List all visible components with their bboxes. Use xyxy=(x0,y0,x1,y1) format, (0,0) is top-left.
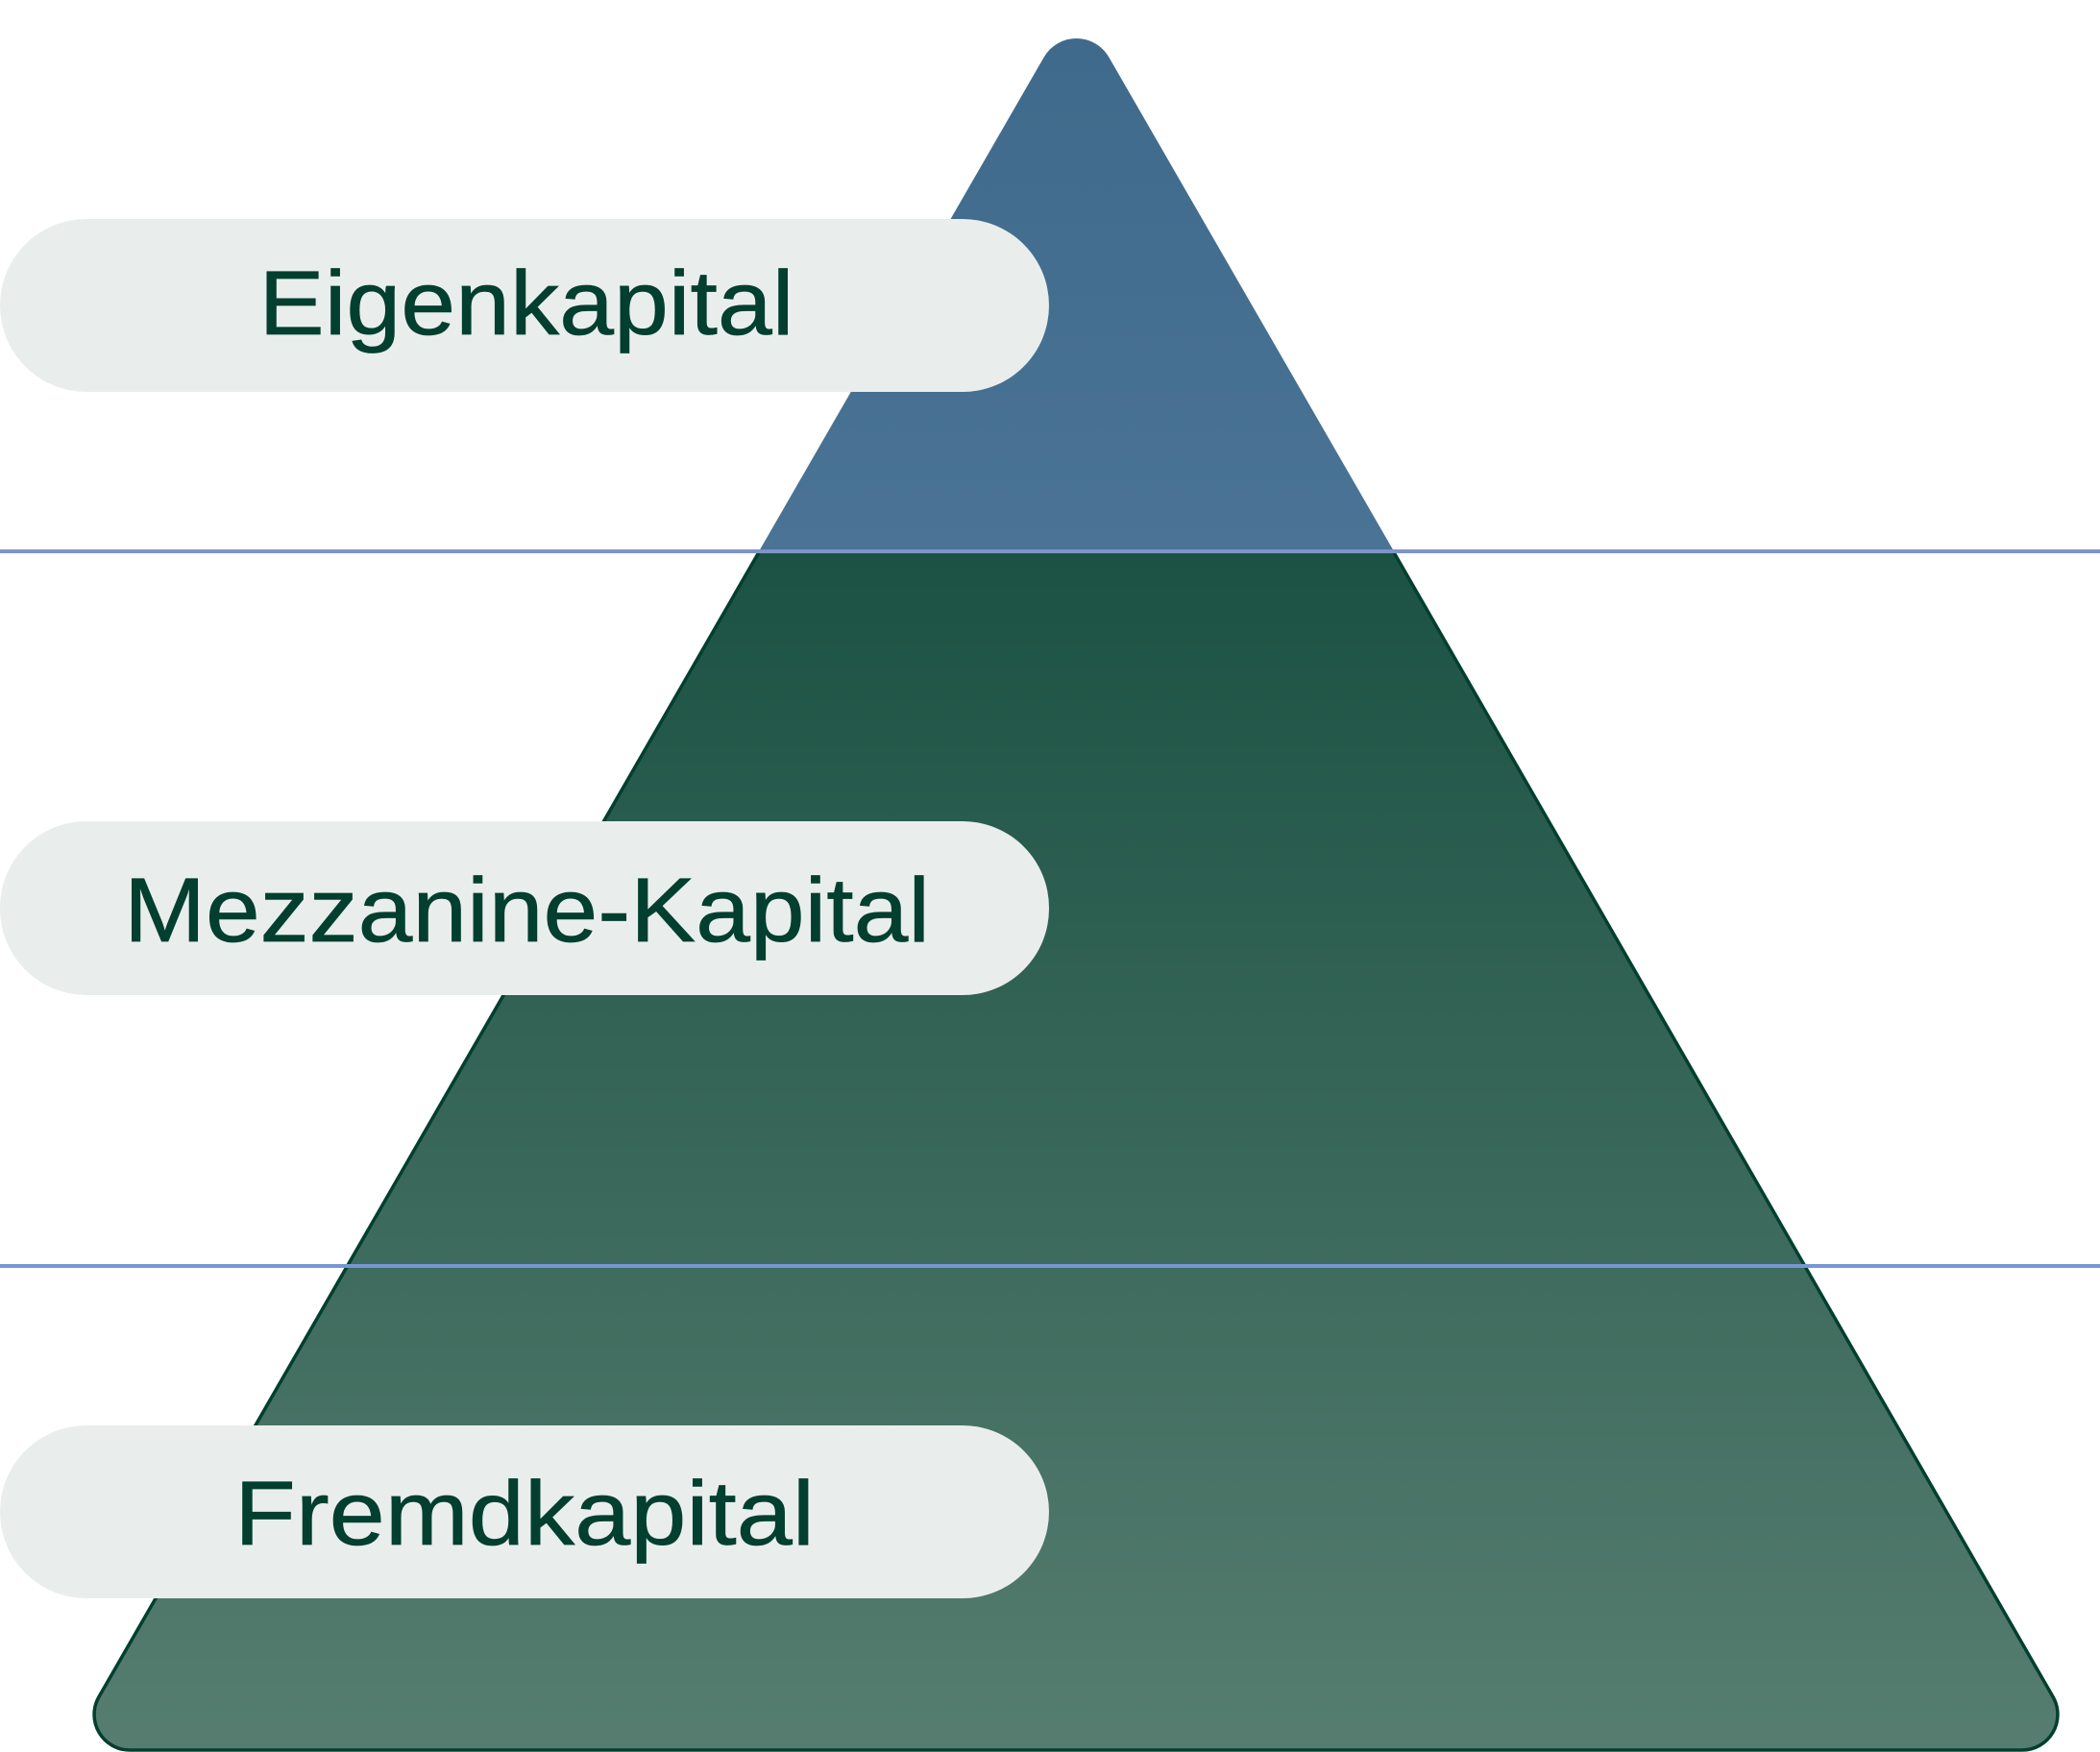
label text: Mezzanine-Kapital: Mezzanine-Kapital xyxy=(124,860,930,961)
divider line: lower tier boundary xyxy=(0,1264,2100,1268)
label text: Fremdkapital: Fremdkapital xyxy=(234,1463,815,1565)
pyramid tier: top blue section xyxy=(759,38,1394,551)
label pill: Mezzanine-Kapital xyxy=(0,821,1049,995)
pyramid tier: lower green section xyxy=(94,551,2058,1750)
label text: Eigenkapital: Eigenkapital xyxy=(259,253,794,354)
divider line: upper tier boundary xyxy=(0,549,2100,553)
label pill: Eigenkapital xyxy=(0,219,1049,392)
label pill: Fremdkapital xyxy=(0,1425,1049,1598)
